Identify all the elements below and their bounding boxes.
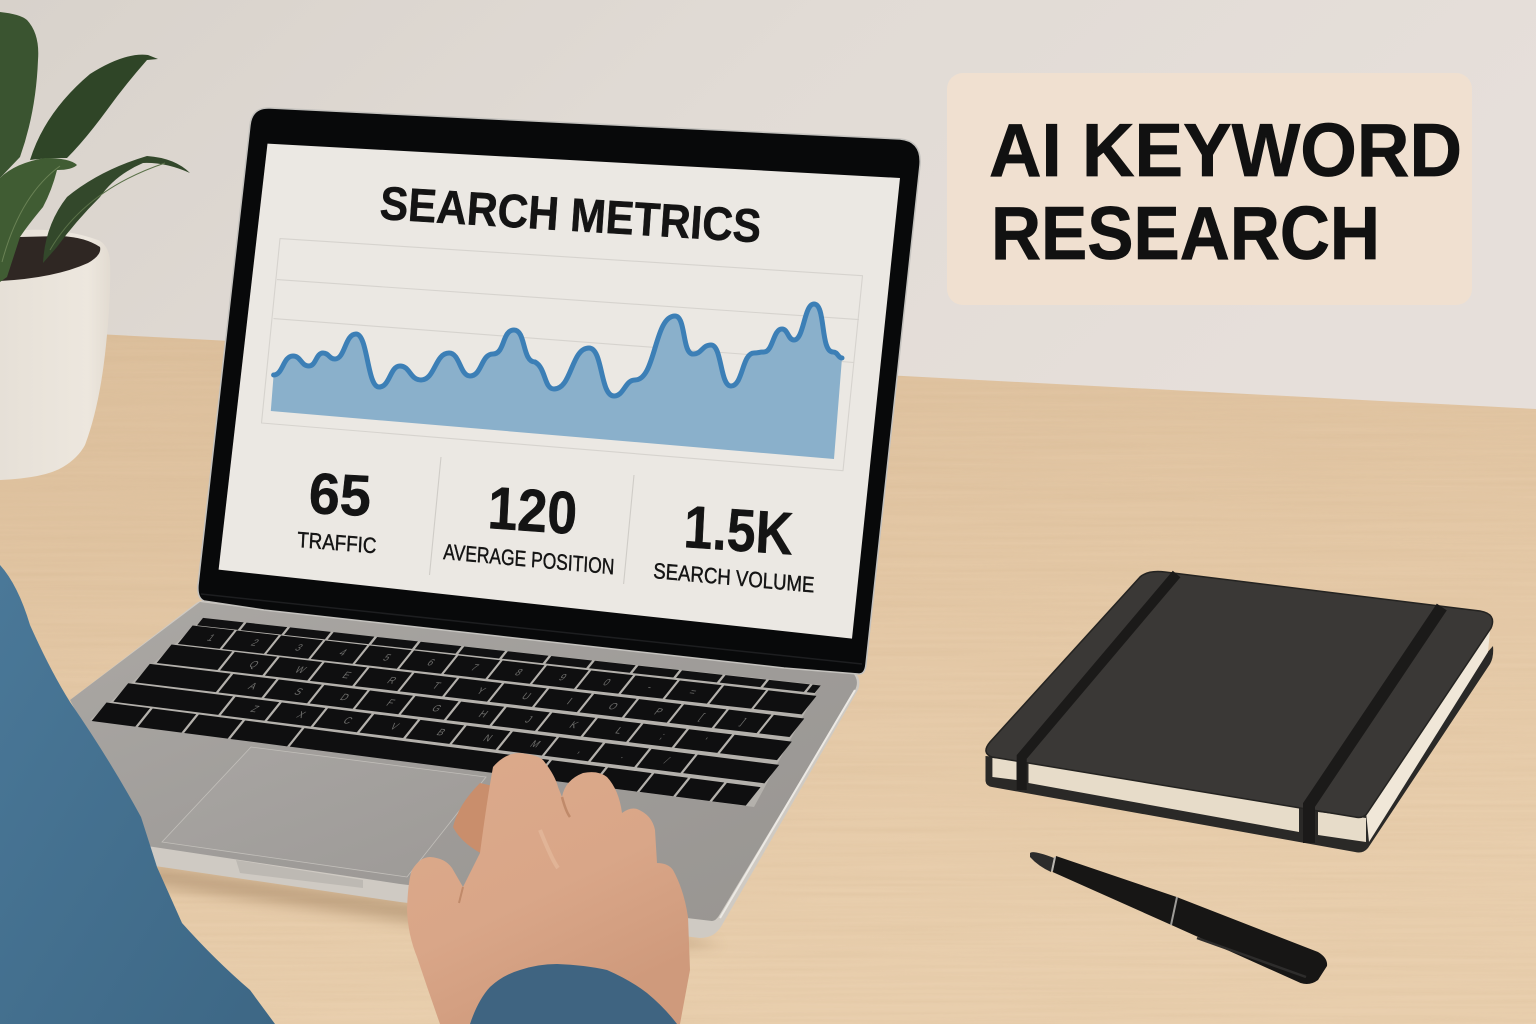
laptop lid <box>198 108 920 674</box>
front notch <box>236 860 363 888</box>
key letters: ASDFGHJKL;' <box>245 682 709 746</box>
plant in pot <box>0 12 190 480</box>
metric: average position <box>443 474 615 579</box>
elastic band right <box>1309 607 1442 843</box>
laptop screen: search metrics dashboard <box>219 144 900 639</box>
trackpad <box>162 747 486 877</box>
notebook <box>986 572 1493 852</box>
function key row <box>200 622 818 689</box>
finger behind <box>453 783 510 858</box>
number key row <box>185 635 809 705</box>
notebook pages <box>992 630 1490 842</box>
leaf lower right <box>43 156 190 263</box>
soil <box>0 236 100 281</box>
metric: search volume: 1.5K <box>682 493 795 568</box>
notebook back cover <box>986 646 1493 852</box>
title text: RESEARCH <box>991 191 1380 275</box>
key letters <box>204 633 748 766</box>
wooden desk <box>0 320 1536 1024</box>
key letters: ZXCVBNM,./ <box>248 705 671 766</box>
metric: traffic <box>297 461 377 558</box>
leaf front <box>0 158 77 282</box>
QWERTY key row <box>164 654 797 728</box>
screen title: SEARCH METRICS <box>378 176 763 252</box>
metric: average position: AVERAGE POSITION <box>443 539 615 579</box>
title panel <box>947 73 1472 305</box>
pen clip <box>1197 938 1306 977</box>
metric: traffic: TRAFFIC <box>297 527 377 558</box>
chart line <box>274 304 842 396</box>
hand back <box>407 753 690 1024</box>
notebook cover <box>986 572 1493 817</box>
wall background <box>0 0 1536 420</box>
metric: search volume <box>653 493 815 597</box>
title text: AI KEYWORD <box>989 108 1462 192</box>
chart frame <box>262 239 862 471</box>
keyboard <box>90 618 820 807</box>
chart area fill <box>271 304 842 459</box>
shirt cuff <box>470 964 677 1024</box>
laptop base <box>70 601 859 938</box>
shirt sleeve <box>0 565 275 1024</box>
leaf upper right <box>30 55 158 160</box>
shift key row <box>121 692 772 774</box>
pot body <box>0 230 110 480</box>
laptop shadow <box>150 865 722 950</box>
hand on trackpad <box>407 753 690 1024</box>
pen body <box>1053 856 1327 984</box>
home key row <box>142 673 784 751</box>
space bar key row <box>99 712 759 797</box>
title text <box>989 108 1462 275</box>
elastic band left <box>1022 574 1177 790</box>
pen tip <box>1030 852 1054 872</box>
metric: average position: 120 <box>486 474 579 547</box>
key letters: QWERTYUIOP[] <box>246 660 748 727</box>
area chart <box>262 239 862 471</box>
metric: search volume: SEARCH VOLUME <box>653 558 815 597</box>
key letters: 1234567890-= <box>204 633 699 698</box>
leaf back left <box>0 12 38 178</box>
metric: traffic: 65 <box>307 461 373 529</box>
laptop <box>70 108 920 950</box>
pen <box>1030 852 1327 984</box>
